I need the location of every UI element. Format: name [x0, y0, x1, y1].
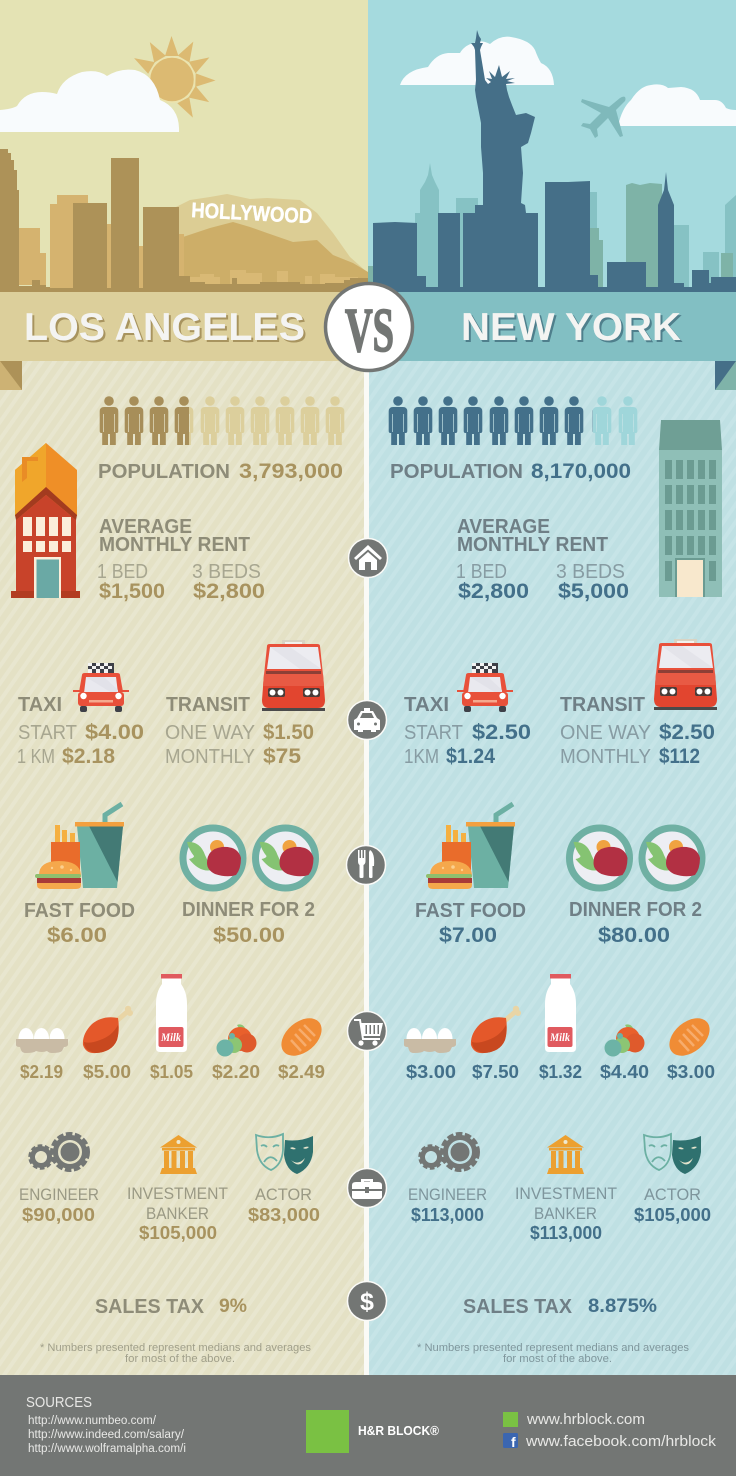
NY footnote [417, 1342, 689, 1365]
LA transit prices: ONE WAY [165, 722, 255, 744]
NY taxi prices: 1KM [404, 746, 439, 768]
LA salaries: $83,000 [248, 1205, 320, 1225]
NY taxi prices: TAXI [404, 694, 449, 716]
NY rent block: $5,000 [558, 580, 629, 603]
LA grocery prices: $5.00 [83, 1062, 131, 1082]
NY salaries: $113,000 [411, 1205, 484, 1225]
NY taxi prices: $1.24 [446, 745, 495, 768]
LA food prices [24, 899, 315, 947]
NY taxi prices: $2.50 [472, 721, 531, 744]
LA footnote [40, 1342, 311, 1365]
icon: NY taxi [457, 663, 513, 712]
Statue of Liberty [463, 30, 538, 292]
NY grocery prices: $7.50 [472, 1062, 519, 1082]
NY food prices: $7.00 [439, 924, 497, 947]
panel: New York data background [369, 361, 736, 1375]
NY transit prices: ONE WAY [560, 722, 651, 744]
facebook link: f [511, 1434, 516, 1450]
NY job icons [420, 1134, 701, 1174]
LA salaries: INVESTMENT [127, 1184, 228, 1203]
NY food prices: $80.00 [598, 924, 670, 947]
foreground buildings [368, 172, 736, 292]
hills with Hollywood sign: HOLLYWOOD [191, 199, 313, 228]
category icon: dollar: $ [360, 1288, 374, 1316]
NY salaries [408, 1184, 711, 1243]
VS badge [326, 284, 412, 370]
category icon: knife and fork [346, 846, 386, 884]
sources: http://www.numbeo.com/ [28, 1415, 157, 1427]
NY grocery prices: $3.00 [667, 1062, 715, 1082]
icon: LA house [11, 443, 80, 598]
icon: NY apartment building [659, 420, 722, 597]
NY food prices: DINNER FOR 2 [569, 899, 702, 921]
NY rent block: $2,800 [458, 580, 529, 603]
LA salaries: BANKER [146, 1204, 209, 1223]
LA sales tax: 9% [219, 1296, 247, 1317]
ribbon fold right [715, 361, 736, 390]
LA salaries: $105,000 [139, 1223, 217, 1243]
NY rent block: AVERAGE [457, 516, 550, 538]
LA taxi prices: $4.00 [85, 721, 144, 744]
panel: New York skyline [368, 0, 736, 292]
NY sales tax [463, 1296, 657, 1318]
category icon: dollar [348, 1282, 386, 1320]
banner: Los Angeles [0, 292, 368, 361]
LA rent block: 1 BED [97, 561, 148, 583]
LA population figure: POPULATION [98, 461, 230, 483]
LA grocery prices [20, 1062, 325, 1082]
H&R Block logo [306, 1410, 440, 1453]
NY rent block: MONTHLY RENT [457, 534, 608, 556]
NY taxi prices: START [404, 722, 463, 744]
cloud [0, 70, 179, 132]
NY sales tax: 8.875% [588, 1296, 657, 1317]
LA population people row [100, 396, 344, 445]
NY groceries icons [404, 974, 717, 1063]
LA taxi prices: TAXI [18, 694, 62, 716]
category icon: shopping cart [348, 1012, 386, 1050]
LA footnote: for most of the above. [125, 1353, 235, 1365]
banner: New York: NEW YORK [463, 308, 683, 351]
NY population figure: POPULATION [390, 461, 523, 483]
LA taxi prices: $2.18 [62, 745, 115, 768]
category icon: house [348, 538, 388, 578]
NY transit prices: MONTHLY [560, 746, 651, 768]
LA food prices: DINNER FOR 2 [182, 899, 315, 921]
H&R Block logo: H&R BLOCK® [358, 1424, 440, 1438]
LA salaries [19, 1184, 320, 1243]
NY population people row [389, 396, 637, 445]
NY transit prices: $112 [659, 745, 700, 768]
icon: sun [131, 36, 216, 121]
icon: LA transit [262, 640, 325, 711]
LA rent block: AVERAGE [99, 516, 192, 538]
NY rent block [456, 516, 629, 603]
NY sales tax: SALES TAX [463, 1296, 573, 1318]
NY transit prices: TRANSIT [560, 694, 645, 716]
NY salaries: BANKER [534, 1204, 597, 1223]
LA sales tax: SALES TAX [95, 1296, 205, 1318]
icon: LA taxi [73, 663, 129, 712]
panel: Los Angeles data background [0, 361, 364, 1375]
LA footnote: * Numbers presented represent medians and averages [40, 1342, 311, 1354]
panel: Los Angeles skyline [0, 0, 368, 292]
LA rent block: $1,500 [99, 580, 165, 603]
banner: Los Angeles: LOS ANGELES [26, 308, 307, 351]
NY rent block: 3 BEDS [556, 561, 625, 583]
LA taxi prices: START [18, 722, 77, 744]
LA transit prices: MONTHLY [165, 746, 255, 768]
icon: LA dinner plates [183, 828, 316, 888]
sources: SOURCES [26, 1395, 92, 1411]
LA rent block [97, 516, 265, 603]
LA rent block: MONTHLY RENT [99, 534, 250, 556]
NY salaries: ENGINEER [408, 1185, 487, 1204]
hills with Hollywood sign [176, 194, 368, 292]
LA rent block: 3 BEDS [192, 561, 261, 583]
LA taxi prices: 1 KM [17, 746, 55, 768]
background buildings [368, 163, 736, 292]
icon: NY transit [654, 639, 717, 710]
NY transit prices [560, 694, 715, 768]
icon: airplane [581, 97, 626, 138]
category icon: briefcase [348, 1168, 386, 1208]
NY population figure [390, 460, 631, 483]
buildings [0, 149, 368, 292]
NY grocery prices: $3.00 [406, 1062, 456, 1082]
NY footnote: * Numbers presented represent medians and averages [417, 1342, 689, 1354]
LA transit prices: $1.50 [263, 721, 314, 744]
NY transit prices: $2.50 [659, 721, 715, 744]
LA taxi prices [17, 694, 144, 768]
facebook link: www.facebook.com/hrblock [525, 1433, 717, 1450]
NY footnote: for most of the above. [503, 1353, 612, 1365]
LA grocery prices: $1.05 [150, 1062, 193, 1082]
LA food prices: $6.00 [47, 924, 107, 947]
LA grocery prices: $2.49 [278, 1062, 325, 1082]
ribbon fold left [0, 361, 22, 390]
icon: NY dinner plates [570, 828, 702, 888]
NY grocery prices: $1.32 [539, 1062, 582, 1082]
LA population figure: 3,793,000 [239, 460, 343, 483]
icon: NY fast food [426, 804, 515, 889]
LA transit prices: TRANSIT [166, 694, 250, 716]
LA food prices: FAST FOOD [24, 900, 135, 922]
NY salaries: $105,000 [634, 1205, 711, 1225]
LA job icons [30, 1134, 313, 1174]
LA transit prices [165, 694, 314, 768]
NY salaries: INVESTMENT [515, 1184, 617, 1203]
sources: http://www.wolframalpha.com/i [28, 1443, 186, 1455]
NY salaries: $113,000 [530, 1223, 602, 1243]
LA transit prices: $75 [263, 745, 301, 768]
NY population figure: 8,170,000 [531, 460, 631, 483]
banner: New York [368, 292, 736, 361]
NY rent block: 1 BED [456, 561, 507, 583]
LA salaries: $90,000 [22, 1205, 95, 1225]
NY grocery prices [406, 1062, 715, 1082]
banner: New York: NEW YORK [461, 306, 681, 349]
LA salaries: ACTOR [255, 1185, 312, 1204]
NY food prices [415, 899, 702, 947]
LA salaries: ENGINEER [19, 1185, 99, 1204]
NY salaries: ACTOR [644, 1185, 701, 1204]
LA population figure [98, 460, 343, 483]
icon: LA fast food [35, 804, 124, 889]
LA food prices: $50.00 [213, 924, 285, 947]
NY grocery prices: $4.40 [600, 1062, 649, 1082]
website link: www.hrblock.com [526, 1411, 645, 1428]
LA groceries icons [16, 974, 329, 1063]
clouds [400, 37, 736, 126]
sources [26, 1395, 186, 1455]
LA grocery prices: $2.20 [212, 1062, 260, 1082]
banner: Los Angeles: LOS ANGELES [24, 306, 305, 349]
NY taxi prices [404, 694, 531, 768]
LA grocery prices: $2.19 [20, 1062, 63, 1082]
sources: http://www.indeed.com/salary/ [28, 1429, 185, 1441]
VS badge: VS [345, 297, 394, 365]
category icon: taxi [348, 700, 386, 740]
LA rent block: $2,800 [193, 580, 265, 603]
NY food prices: FAST FOOD [415, 900, 526, 922]
footer [0, 1375, 736, 1476]
